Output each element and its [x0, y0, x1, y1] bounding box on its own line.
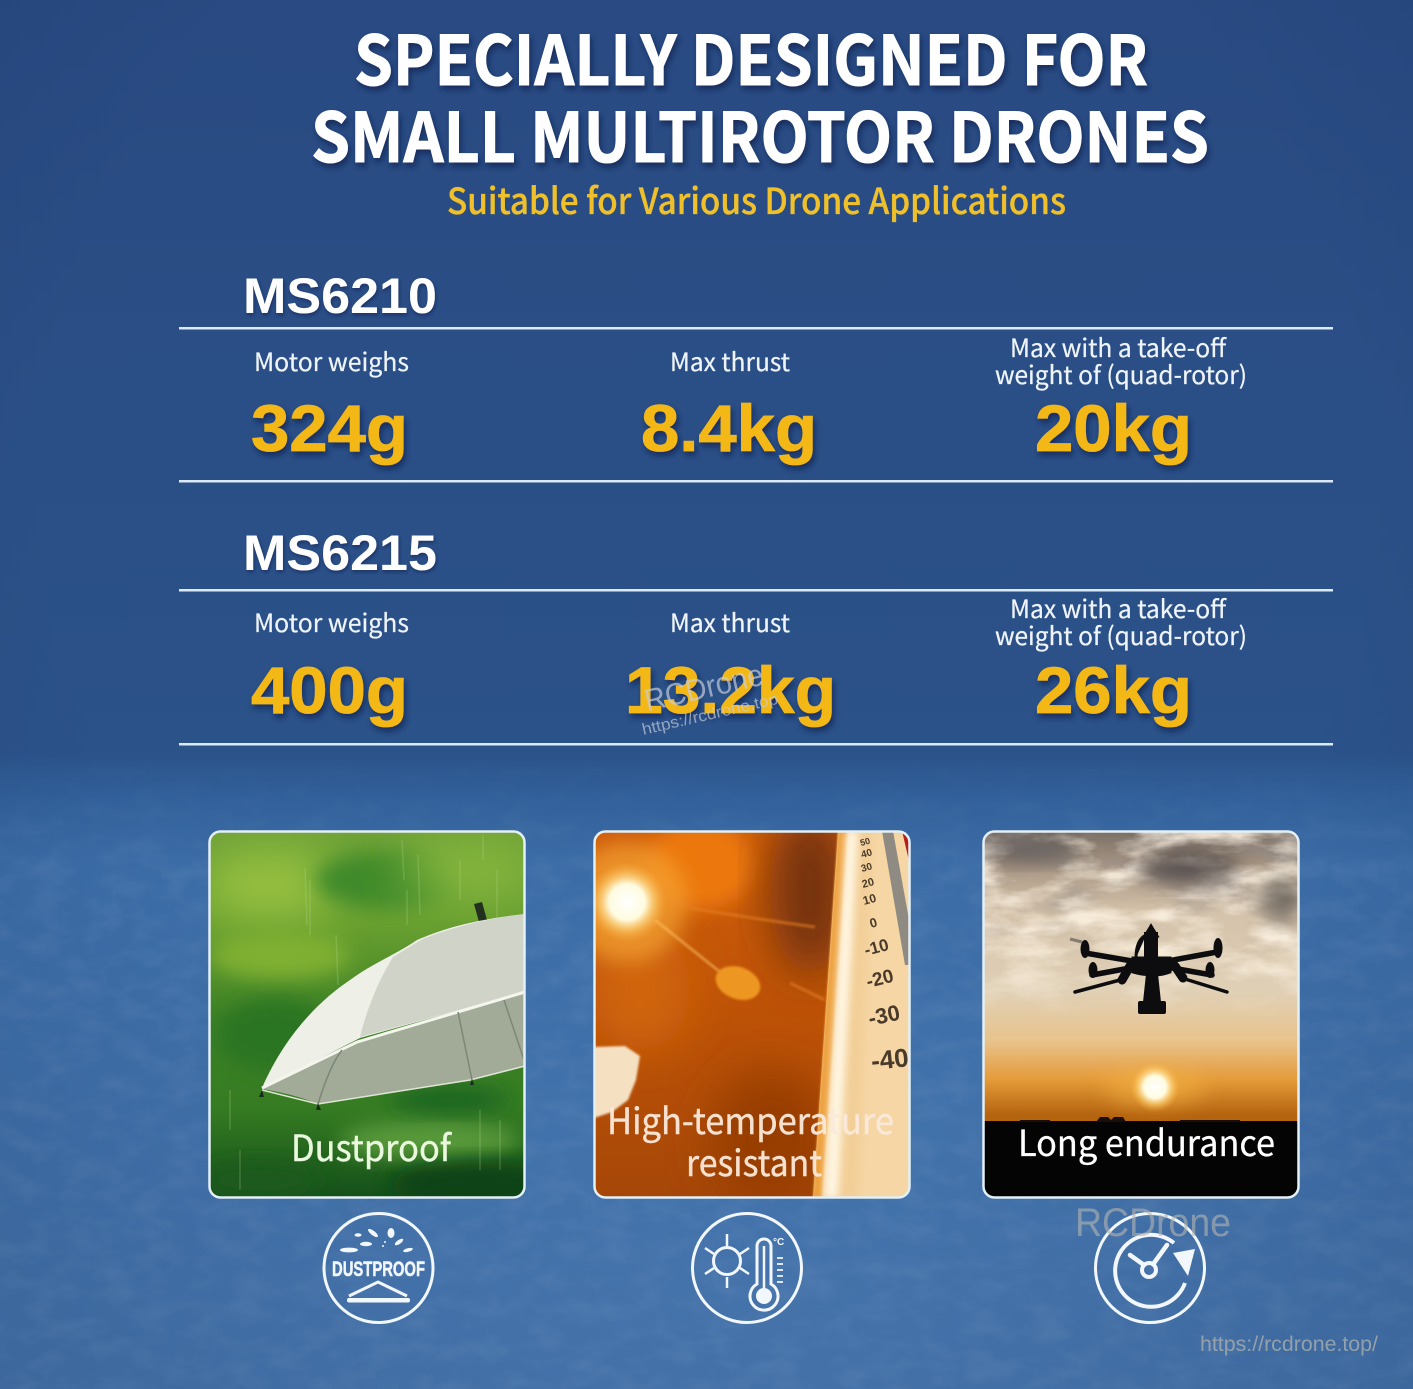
spec: max take-off weight: Max with a take-off	[1010, 590, 1227, 626]
spec: max take-off weight	[995, 590, 1247, 727]
sun	[1133, 1066, 1177, 1110]
spec: max take-off weight: weight of (quad-rotor)	[995, 617, 1247, 653]
panel: high-temperature photo	[593, 830, 911, 1199]
cloud	[594, 1046, 640, 1118]
spec: motor weight: Motor weighs	[254, 604, 409, 640]
spec: motor weight	[251, 343, 409, 465]
model name: MS6215: MS6215	[243, 525, 437, 581]
model name: MS6210: MS6210	[243, 268, 437, 324]
spec: max thrust: Max thrust	[670, 343, 791, 379]
spec: max take-off weight: 26kg	[1035, 653, 1192, 727]
spec: max thrust	[641, 343, 817, 465]
subtitle: Suitable for Various Drone Applications	[447, 173, 1066, 225]
title: SPECIALLY DESIGNED FOR	[354, 6, 1148, 105]
watermark: RCDrone: RCDrone	[1075, 1201, 1231, 1245]
thermometer scale: 20	[861, 876, 876, 891]
icon: dustproof	[324, 1214, 433, 1322]
thermometer scale: 30	[860, 861, 874, 875]
label: high-temperature resistant: resistant	[686, 1135, 822, 1187]
thermometer scale: -40	[869, 1042, 910, 1076]
spec: motor weight: Motor weighs	[254, 343, 409, 379]
spec: motor weight: 324g	[251, 391, 408, 465]
thermometer scale: -20	[864, 966, 896, 993]
watermark: url: https://rcdrone.top/	[1200, 1333, 1378, 1356]
icon: high temperature	[692, 1214, 802, 1322]
title: SMALL MULTIROTOR DRONES	[311, 83, 1209, 182]
spec: motor weight: 400g	[251, 653, 408, 727]
icon: endurance clock	[1096, 1214, 1204, 1322]
icon: dustproof: DUSTPROOF	[332, 1258, 425, 1281]
watermark: centre: https://rcdrone.top	[640, 691, 780, 739]
sun	[596, 866, 664, 938]
title	[311, 6, 1209, 182]
label: long endurance: Long endurance	[1018, 1115, 1275, 1167]
umbrella ferrule	[474, 902, 487, 922]
section: MS6215 specs	[179, 525, 1333, 746]
spec: max thrust	[625, 604, 836, 727]
spec: motor weight	[251, 604, 409, 727]
thermometer scale: 10	[861, 891, 878, 908]
spec: max take-off weight: weight of (quad-rotor)	[995, 356, 1247, 392]
panel: dustproof photo	[208, 830, 526, 1199]
thermometer body	[813, 831, 910, 1198]
label: high-temperature resistant	[607, 1093, 894, 1187]
panel: long endurance photo	[980, 831, 1304, 1198]
thermometer scale	[860, 838, 908, 1068]
icon: high temperature: °C	[773, 1237, 784, 1248]
spec: max thrust: 13.2kg	[625, 653, 836, 727]
lens flare	[655, 920, 720, 972]
watermark: centre	[632, 655, 780, 739]
thermometer scale: 50	[859, 836, 871, 848]
horizon	[983, 1121, 1299, 1198]
rain streaks	[230, 835, 500, 1190]
spec: max thrust: 8.4kg	[641, 391, 817, 465]
thermometer scale: -30	[866, 1000, 902, 1031]
watermark: centre: RCDrone	[641, 657, 767, 718]
spec: max take-off weight: 20kg	[1035, 391, 1192, 465]
umbrella canopy	[262, 914, 525, 1088]
drone silhouette	[1075, 926, 1227, 1014]
spec: max take-off weight: Max with a take-off	[1010, 329, 1227, 365]
label: dustproof: Dustproof	[291, 1120, 452, 1172]
thermometer scale: 0	[868, 915, 879, 931]
thermometer scale: -10	[862, 935, 891, 960]
section: MS6210 specs	[179, 268, 1333, 482]
spec: max thrust: Max thrust	[670, 604, 791, 640]
spec: max take-off weight	[995, 329, 1247, 465]
label: high-temperature resistant: High-temperature	[607, 1093, 894, 1145]
thermometer scale: 40	[860, 847, 874, 861]
